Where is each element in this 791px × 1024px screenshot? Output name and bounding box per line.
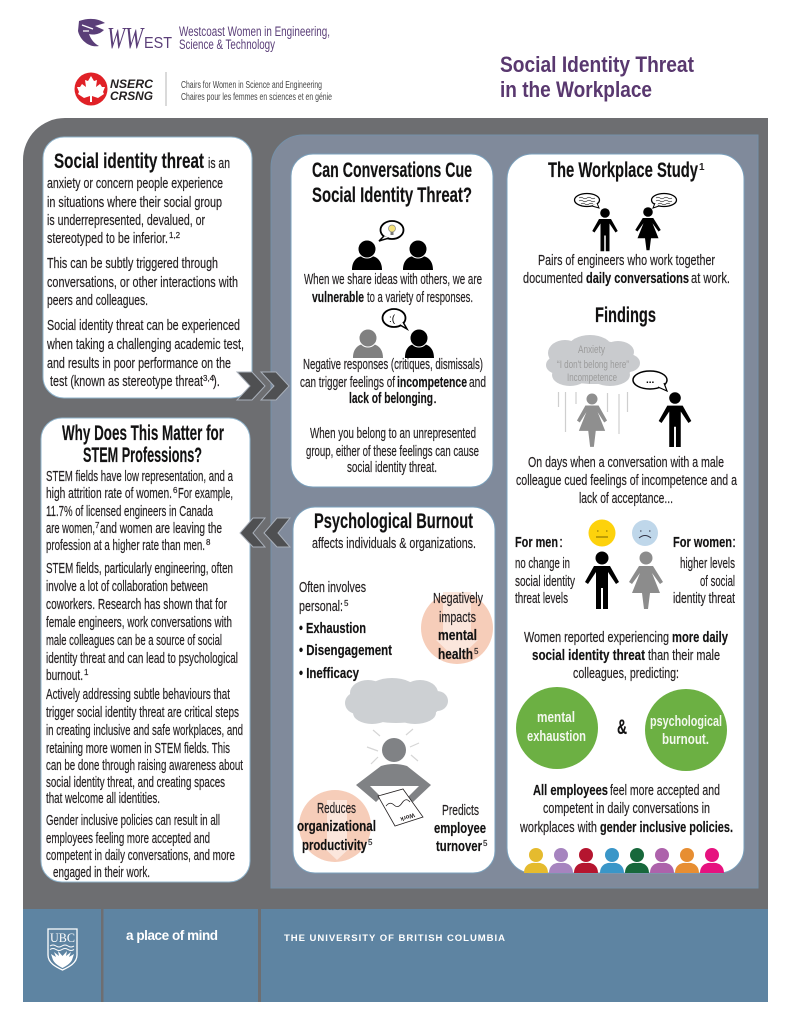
panel: why does this matter: social identity threat, and creating spaces (46, 774, 225, 791)
footer band: a place of mind (126, 928, 218, 943)
circle: mental exhaustion: mental (537, 709, 575, 726)
header logo: WWEST: Westcoast Women in Engineering, (179, 24, 330, 39)
panel: the workplace study and findings: lack of acceptance... (579, 490, 673, 507)
footer band (23, 909, 768, 1002)
panel: psychological burnout: Psychological Burnout (314, 510, 473, 533)
panel: why does this matter: burnout. (46, 667, 83, 684)
callout: reduces organizational productivity: productivity (302, 837, 367, 854)
icon: UBC crest (48, 929, 77, 970)
icon: row of diverse people (524, 848, 724, 873)
panel: the workplace study and findings: at work. (691, 270, 730, 287)
circle: mental exhaustion (516, 687, 598, 769)
arrow: chevrons pointing right (237, 372, 289, 400)
icon: stressed person with cloud and work paper: Work (399, 811, 415, 822)
header logo: WWEST: Science & Technology (179, 37, 275, 52)
panel: why does this matter: STEM Professions? (83, 444, 202, 467)
callout: predicts employee turnover (434, 802, 488, 855)
panel: why does this matter: coworkers. Research has shown that for (46, 596, 227, 613)
panel: can conversations cue social identity threat (291, 154, 493, 487)
panel: social identity threat definition: and results in poor performance on the (47, 355, 231, 372)
text block: for men: For men (515, 534, 558, 551)
callout: negatively impacts mental health: Negatively (433, 590, 483, 607)
panel: why does this matter: employees feeling more accepted and (46, 830, 210, 847)
panel: social identity threat definition: anxiety or concern people experience (47, 175, 223, 192)
panel: why does this matter: profession at a higher rate than men. (46, 537, 205, 554)
panel: the workplace study and findings: All employees (533, 782, 608, 799)
callout: negatively impacts mental health: 5 (474, 647, 479, 656)
icon: woman under thought cloud beside man speaking: Anxiety (578, 344, 605, 356)
panel: can conversations cue social identity threat: lack of belonging (349, 390, 433, 407)
panel: why does this matter: trigger social identity threat are critical steps (46, 704, 239, 721)
panel: the workplace study and findings: feel more accepted and (610, 782, 720, 799)
text block: for men: : (559, 534, 563, 551)
panel: why does this matter: 1 (84, 668, 89, 677)
panel: why does this matter: can be done through raising awareness about (46, 757, 244, 774)
icon: woman under thought cloud beside man speaking: Incompetence (567, 372, 617, 384)
title: in the Workplace (500, 77, 652, 102)
panel: social identity threat definition: 3,4 (203, 374, 215, 383)
panel: can conversations cue social identity threat: vulnerable (312, 289, 364, 306)
text block: for women: of social (700, 573, 735, 590)
panel: can conversations cue social identity threat: can trigger feelings of (300, 374, 396, 391)
icon: woman under thought cloud beside man speaking: “I don't belong here” (557, 359, 629, 371)
header logo: NSERC CRSNG: NSERC (110, 77, 153, 91)
icon: man and woman with emotion faces (585, 520, 663, 609)
panel: the workplace study and findings: more daily (672, 629, 728, 646)
panel: psychological burnout: personal: (299, 598, 343, 615)
arrow: chevrons pointing left (240, 518, 290, 547)
panel: can conversations cue social identity threat: When we share ideas with others, we are (304, 271, 482, 288)
circle: mental exhaustion: exhaustion (527, 728, 586, 745)
panel: can conversations cue social identity threat: Can Conversations Cue (312, 159, 472, 182)
header logo: NSERC CRSNG (74, 72, 332, 106)
panel: psychological burnout (293, 507, 495, 873)
text block: for women: : (732, 534, 736, 551)
header logo: NSERC CRSNG: CRSNG (110, 89, 153, 103)
text block: for women (673, 534, 736, 607)
panel: why does this matter: engaged in their work. (53, 864, 150, 881)
text block: for women: identity threat (673, 590, 736, 607)
panel: social identity threat definition: conversations, or other interactions with (47, 274, 238, 291)
circle: psychological burnout (645, 689, 727, 771)
circle: psychological burnout: burnout. (662, 731, 709, 748)
panel: the workplace study and findings (507, 154, 744, 873)
panel: why does this matter: that welcome all identities. (46, 790, 160, 807)
callout: reduces organizational productivity (297, 790, 376, 862)
panel: can conversations cue social identity threat: . (433, 390, 437, 407)
title: Social Identity Threat (500, 52, 695, 77)
panel: can conversations cue social identity threat: incompetence (397, 374, 467, 391)
callout: negatively impacts mental health: health (438, 646, 473, 663)
panel: social identity threat definition: test (known as stereotype threat (50, 373, 204, 390)
panel: why does this matter: are women, (46, 520, 95, 537)
panel: social identity threat definition: is underrepresented, devalued, or (47, 212, 205, 229)
icon: two people negative response (353, 309, 434, 358)
panel: can conversations cue social identity threat: social identity threat. (347, 459, 437, 476)
panel: why does this matter: high attrition rate of women. (46, 485, 172, 502)
panel: why does this matter: STEM fields, particularly engineering, often (46, 560, 233, 577)
panel: the workplace study and findings: Findings (595, 304, 656, 327)
panel: why does this matter: male colleagues can be a source of social (46, 632, 222, 649)
text block: for men: threat levels (515, 590, 568, 607)
panel: why does this matter: female engineers, work conversations with (46, 614, 232, 631)
panel: social identity threat definition: This can be subtly triggered through (47, 255, 218, 272)
header logo: WWEST: EST (144, 35, 172, 52)
text block: for women: higher levels (680, 555, 735, 572)
panel: can conversations cue social identity threat: to a variety of responses. (367, 289, 473, 306)
panel: the workplace study and findings: & (617, 716, 627, 739)
icon: woman under thought cloud beside man speaking (546, 335, 691, 447)
panel: psychological burnout: • Disengagement (299, 642, 392, 659)
callout: negatively impacts mental health: impacts (439, 609, 476, 626)
title (500, 52, 695, 102)
panel: psychological burnout: 5 (344, 599, 349, 608)
text block: for women: For women (673, 534, 732, 551)
panel: why does this matter: Why Does This Matter for (62, 422, 224, 445)
panel: the workplace study and findings: competent in daily conversations in (543, 800, 710, 817)
panel: social identity threat definition (43, 137, 252, 398)
icon: two people negative response: :( (389, 314, 396, 325)
panel: can conversations cue social identity threat: and (469, 374, 486, 391)
panel: the workplace study and findings: workplaces with (519, 819, 597, 836)
text block: for men (515, 534, 575, 607)
icon: woman under thought cloud beside man speaking: ... (646, 375, 655, 386)
panel: the workplace study and findings: daily conversations (586, 270, 689, 287)
panel: the workplace study and findings: than their male (648, 647, 720, 664)
header logo: WWEST (78, 19, 330, 55)
callout: negatively impacts mental health: mental (438, 627, 477, 644)
panel: the workplace study and findings: gender inclusive policies. (600, 819, 733, 836)
panel: why does this matter: STEM fields have low representation, and a (46, 468, 233, 485)
callout: reduces organizational productivity: organizational (297, 818, 376, 835)
panel: slate inner background (271, 135, 758, 888)
panel: grey background (23, 118, 768, 909)
panel: social identity threat definition: ). (213, 373, 220, 390)
panel: psychological burnout: affects individuals & organizations. (312, 535, 476, 552)
header logo: WWEST: WW (107, 20, 145, 55)
panel: can conversations cue social identity threat: Social Identity Threat? (312, 184, 472, 207)
panel: why does this matter: in creating inclusive and safe workplaces, and (46, 722, 243, 739)
panel: the workplace study and findings: Pairs of engineers who work together (538, 252, 715, 269)
panel: social identity threat definition: is an (208, 155, 230, 172)
panel: the workplace study and findings: The Workplace Study (548, 159, 698, 182)
panel: why does this matter: Gender inclusive policies can result in all (46, 812, 220, 829)
panel: why does this matter: Actively addressing subtle behaviours that (46, 686, 231, 703)
callout: predicts employee turnover: 5 (483, 839, 488, 848)
callout: predicts employee turnover: employee (434, 820, 486, 837)
panel: psychological burnout: • Exhaustion (299, 620, 366, 637)
panel: psychological burnout: Often involves (299, 579, 366, 596)
callout: reduces organizational productivity: Reduces (317, 800, 356, 817)
icon: stressed person with cloud and work paper (345, 678, 448, 826)
panel: why does this matter: 6 (173, 486, 178, 495)
panel: the workplace study and findings: documented (523, 270, 583, 287)
callout: reduces organizational productivity: 5 (368, 838, 373, 847)
panel: can conversations cue social identity threat: Negative responses (critiques, dismissals) (303, 356, 483, 373)
icon: WWEST bird crest (78, 19, 105, 46)
panel: the workplace study and findings: social identity threat (532, 647, 645, 664)
text block: for men: no change in (515, 555, 570, 572)
panel: social identity threat definition: 1,2 (169, 231, 181, 240)
panel: can conversations cue social identity threat: group, either of these feelings can cause (306, 443, 479, 460)
panel: social identity threat definition: Social identity threat can be experienced (47, 317, 240, 334)
panel: social identity threat definition: in situations where their social group (47, 194, 222, 211)
panel: social identity threat definition: Social identity threat (54, 150, 204, 173)
panel: can conversations cue social identity threat: When you belong to an unrepresented (310, 425, 476, 442)
panel: the workplace study and findings: Women reported experiencing (524, 629, 669, 646)
panel: social identity threat definition: when taking a challenging academic test, (46, 336, 244, 353)
panel: why does this matter: involve a lot of collaboration between (46, 578, 208, 595)
panel: why does this matter: competent in daily conversations, and more (46, 847, 235, 864)
icon: man and woman pair talking (574, 194, 676, 251)
panel: why does this matter: 11.7% of licensed engineers in Canada (46, 503, 213, 520)
text block: for men: social identity (515, 573, 575, 590)
callout: predicts employee turnover: Predicts (442, 802, 479, 819)
panel: social identity threat definition: peers and colleagues. (47, 292, 148, 309)
panel: psychological burnout: • Inefficacy (299, 665, 359, 682)
panel: the workplace study and findings: 1 (699, 162, 705, 173)
panel: why does this matter: 7 (95, 521, 100, 530)
callout: negatively impacts mental health (421, 590, 493, 664)
icon: two people sharing an idea (352, 221, 433, 270)
panel: social identity threat definition: stereotyped to be inferior. (47, 230, 168, 247)
panel: the workplace study and findings: colleagues, predicting: (573, 665, 679, 682)
panel: why does this matter: For example, (178, 485, 233, 502)
panel: why does this matter: identity threat and can lead to psychological (46, 650, 238, 667)
icon: UBC crest: UBC (50, 930, 75, 945)
header logo: NSERC CRSNG: Chairs for Women in Science and Engineering (181, 80, 322, 91)
header logo: NSERC CRSNG: Chaires pour les femmes en sciences et en génie (181, 92, 332, 103)
panel: why does this matter: and women are leaving the (100, 520, 222, 537)
circle: psychological burnout: psychological (650, 713, 722, 730)
callout: predicts employee turnover: turnover (436, 838, 482, 855)
footer band: THE UNIVERSITY OF BRITISH COLUMBIA (284, 933, 505, 944)
panel: why does this matter (41, 418, 250, 882)
panel: why does this matter: 8 (206, 538, 211, 547)
panel: why does this matter: retaining more women in STEM fields. This (46, 740, 230, 757)
